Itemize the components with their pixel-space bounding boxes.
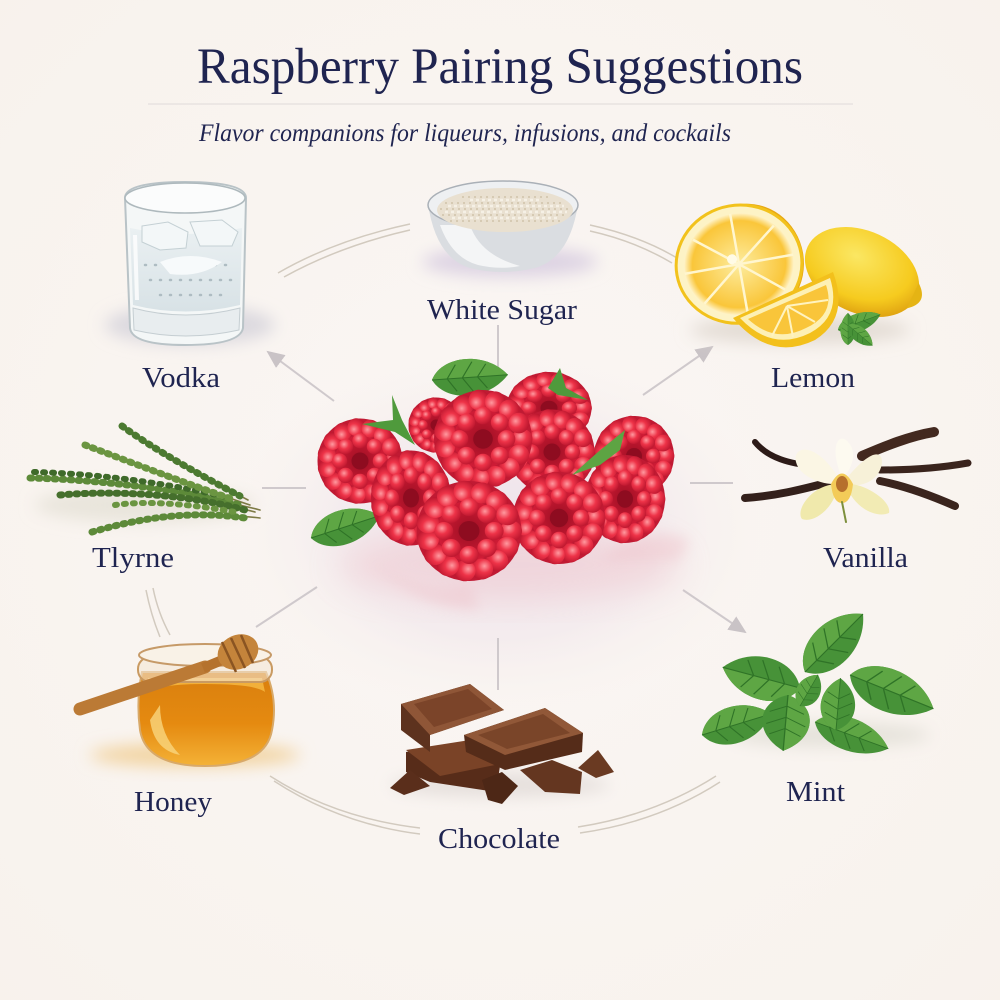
icon: chocolate pieces — [390, 684, 614, 804]
central raspberry pile — [306, 356, 690, 610]
icon: mint sprig — [697, 599, 942, 764]
icon: honey jar with dipper — [80, 628, 300, 767]
label: Honey: Honey — [134, 786, 212, 818]
arrows radiating from the raspberries — [256, 325, 745, 690]
label: Lemon: Lemon — [771, 362, 855, 394]
connecting arcs — [146, 224, 720, 834]
icon: vanilla pods and orchid — [745, 432, 968, 522]
icon: vodka glass — [105, 182, 275, 345]
subtitle: Flavor companions for liqueurs, infusions, and cockails — [198, 120, 731, 147]
icon: bowl of white sugar — [422, 181, 598, 277]
label: Mint: Mint — [786, 776, 845, 808]
label: Chocolate: Chocolate — [438, 823, 560, 855]
label: White Sugar: White Sugar — [427, 294, 577, 326]
central watercolor wash — [230, 350, 770, 710]
label: Vodka: Vodka — [142, 362, 220, 394]
label: Vanilla: Vanilla — [823, 542, 908, 574]
icon: thyme sprigs — [30, 426, 260, 532]
label: Tlyrne: Tlyrne — [92, 542, 174, 574]
title: Raspberry Pairing Suggestions — [197, 39, 803, 95]
icon: lemons — [667, 195, 938, 351]
